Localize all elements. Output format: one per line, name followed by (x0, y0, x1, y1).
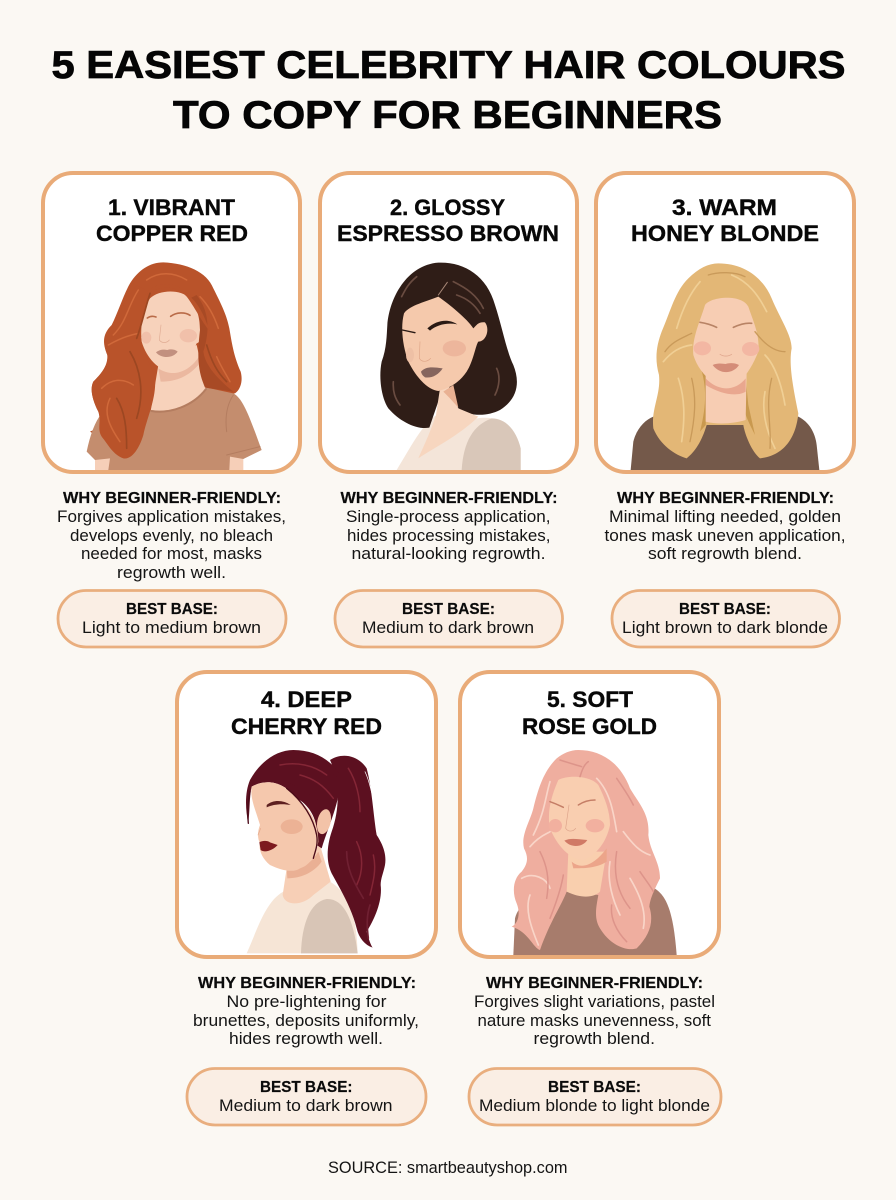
heading 5: 5. SOFT (547, 687, 634, 712)
heading 5 (522, 687, 657, 739)
why beginner-friendly 1: WHY BEGINNER-FRIENDLY: (63, 490, 281, 507)
panel: 5 soft rose gold (460, 672, 721, 1125)
portrait: rose gold hair (512, 750, 677, 955)
card frame 4 (177, 672, 436, 957)
why beginner-friendly 1: needed for most, masks (81, 545, 262, 563)
best base pill 2: BEST BASE: (402, 601, 495, 618)
why beginner-friendly 2: natural-looking regrowth. (352, 545, 546, 563)
why beginner-friendly 4 (193, 975, 419, 1048)
card frame 1 (43, 173, 300, 472)
why beginner-friendly 4: hides regrowth well. (229, 1030, 383, 1048)
heading 3: HONEY BLONDE (631, 221, 819, 246)
why beginner-friendly 5 (474, 975, 715, 1048)
best base pill 5 (469, 1068, 721, 1125)
heading 4: 4. DEEP (261, 687, 352, 712)
best base pill 1: BEST BASE: (126, 601, 218, 618)
why beginner-friendly 5: WHY BEGINNER-FRIENDLY: (486, 975, 703, 992)
portrait: copper red hair (87, 262, 262, 470)
why beginner-friendly 2 (340, 490, 558, 563)
heading 2: ESPRESSO BROWN (337, 221, 559, 246)
best base pill 5: Medium blonde to light blonde (479, 1097, 710, 1115)
why beginner-friendly 3: WHY BEGINNER-FRIENDLY: (617, 490, 834, 507)
heading 2 (337, 195, 559, 246)
why beginner-friendly 1: develops evenly, no bleach (70, 527, 273, 545)
why beginner-friendly 3 (604, 490, 846, 563)
why beginner-friendly 4: WHY BEGINNER-FRIENDLY: (198, 975, 416, 992)
why beginner-friendly 5: nature masks unevenness, soft (478, 1012, 711, 1030)
title (52, 44, 846, 137)
why beginner-friendly 3: tones mask uneven application, (604, 527, 846, 545)
card frame 2 (320, 173, 577, 472)
why beginner-friendly 5: regrowth blend. (534, 1030, 655, 1048)
best base pill 4: Medium to dark brown (219, 1097, 392, 1115)
panel: 4 deep cherry red (177, 672, 436, 1125)
best base pill 3 (612, 590, 840, 647)
best base pill 4: BEST BASE: (260, 1079, 352, 1096)
why beginner-friendly 3: soft regrowth blend. (648, 545, 802, 563)
best base pill 2: Medium to dark brown (362, 619, 534, 637)
panel: 3 warm honey blonde (596, 173, 854, 647)
why beginner-friendly 2: hides processing mistakes, (347, 527, 550, 545)
why beginner-friendly 1 (57, 490, 286, 582)
source line: SOURCE: smartbeautyshop.com (328, 1159, 568, 1177)
title: 5 EASIEST CELEBRITY HAIR COLOURS (52, 44, 846, 87)
portrait: honey blonde hair (631, 263, 819, 470)
best base pill 1 (58, 590, 286, 647)
heading 2: 2. GLOSSY (390, 195, 505, 220)
heading 1: 1. VIBRANT (108, 195, 236, 220)
heading 4: CHERRY RED (231, 714, 382, 739)
heading 3: 3. WARM (672, 195, 777, 220)
best base pill 3: BEST BASE: (679, 601, 771, 618)
why beginner-friendly 1: regrowth well. (117, 564, 226, 582)
panel: 1 vibrant copper red (43, 173, 300, 647)
why beginner-friendly 5: Forgives slight variations, pastel (474, 993, 715, 1011)
portrait: espresso brown hair (380, 263, 521, 470)
best base pill 1: Light to medium brown (82, 619, 261, 637)
why beginner-friendly 1: Forgives application mistakes, (57, 508, 286, 526)
why beginner-friendly 3: Minimal lifting needed, golden (609, 508, 841, 526)
title: TO COPY FOR BEGINNERS (173, 94, 722, 137)
heading 1 (96, 195, 248, 246)
why beginner-friendly 4: No pre-lightening for (226, 993, 387, 1011)
best base pill 5: BEST BASE: (548, 1079, 641, 1096)
best base pill 2 (335, 590, 562, 647)
why beginner-friendly 2: WHY BEGINNER-FRIENDLY: (340, 490, 558, 507)
heading 1: COPPER RED (96, 221, 248, 246)
card frame 3 (596, 173, 854, 472)
why beginner-friendly 2: Single-process application, (346, 508, 550, 526)
best base pill 4 (187, 1068, 426, 1125)
card frame 5 (460, 672, 719, 957)
portrait: cherry red ponytail (246, 750, 385, 953)
heading 5: ROSE GOLD (522, 714, 657, 739)
heading 4 (231, 687, 382, 739)
best base pill 3: Light brown to dark blonde (622, 619, 828, 637)
panel: 2 glossy espresso brown (320, 173, 577, 647)
why beginner-friendly 4: brunettes, deposits uniformly, (193, 1012, 419, 1030)
heading 3 (631, 195, 819, 246)
